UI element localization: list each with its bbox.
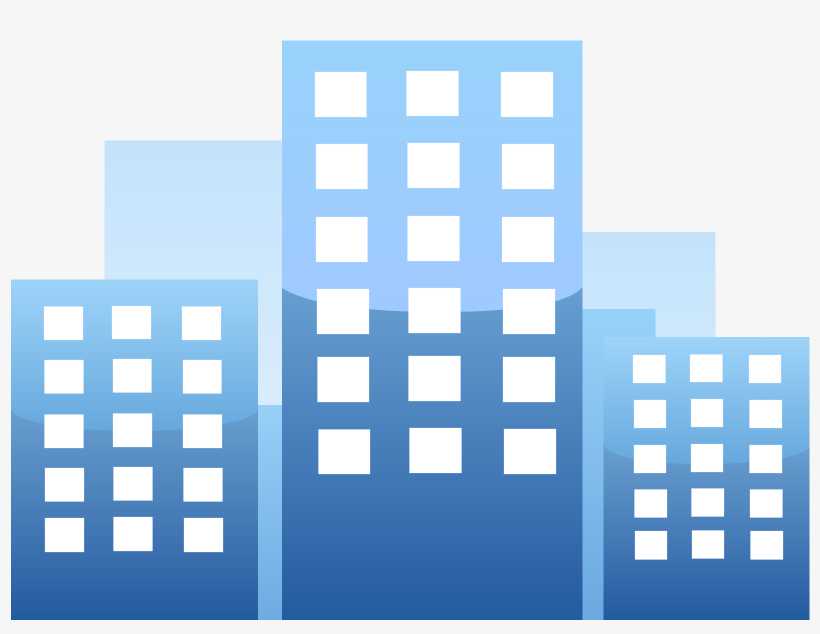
windows: center tower [315,71,556,474]
building: front left [11,280,258,620]
building: center tower [282,40,582,620]
windows: front right [633,354,783,560]
building: mid-ground right [580,309,656,620]
building: far back left [104,140,284,410]
building: front right [604,337,810,620]
building: far back right [580,232,716,342]
building: mid-ground left [255,405,285,620]
windows: front left [44,306,223,552]
